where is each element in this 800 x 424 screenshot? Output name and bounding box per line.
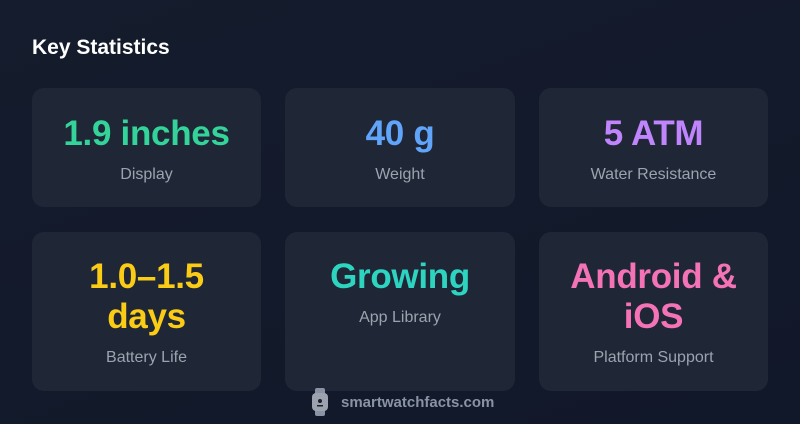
icon: watch xyxy=(312,388,328,416)
footer xyxy=(312,388,494,416)
card: weight: 40 g xyxy=(366,114,434,153)
title: Key Statistics xyxy=(32,36,170,59)
card: display xyxy=(32,88,261,207)
card: water resistance: 5 ATM xyxy=(604,114,703,153)
card: battery xyxy=(32,232,261,391)
card: app library: App Library xyxy=(359,309,441,326)
card: weight: Weight xyxy=(375,166,425,183)
card: battery: Battery Life xyxy=(106,349,187,366)
card: weight xyxy=(285,88,515,207)
card: platform: Android & xyxy=(570,257,737,296)
card: battery: days xyxy=(107,297,186,336)
footer: smartwatchfacts.com xyxy=(341,394,494,410)
card: display: 1.9 inches xyxy=(63,114,230,153)
card: battery: 1.0–1.5 xyxy=(89,257,204,296)
card: platform: iOS xyxy=(624,297,683,336)
card: display: Display xyxy=(120,166,173,183)
card: water resistance: Water Resistance xyxy=(591,166,716,183)
card: platform: Platform Support xyxy=(593,349,714,366)
card: app library: Growing xyxy=(330,257,470,296)
card: water resistance xyxy=(539,88,768,207)
card: platform xyxy=(539,232,768,391)
card: app library xyxy=(285,232,515,391)
